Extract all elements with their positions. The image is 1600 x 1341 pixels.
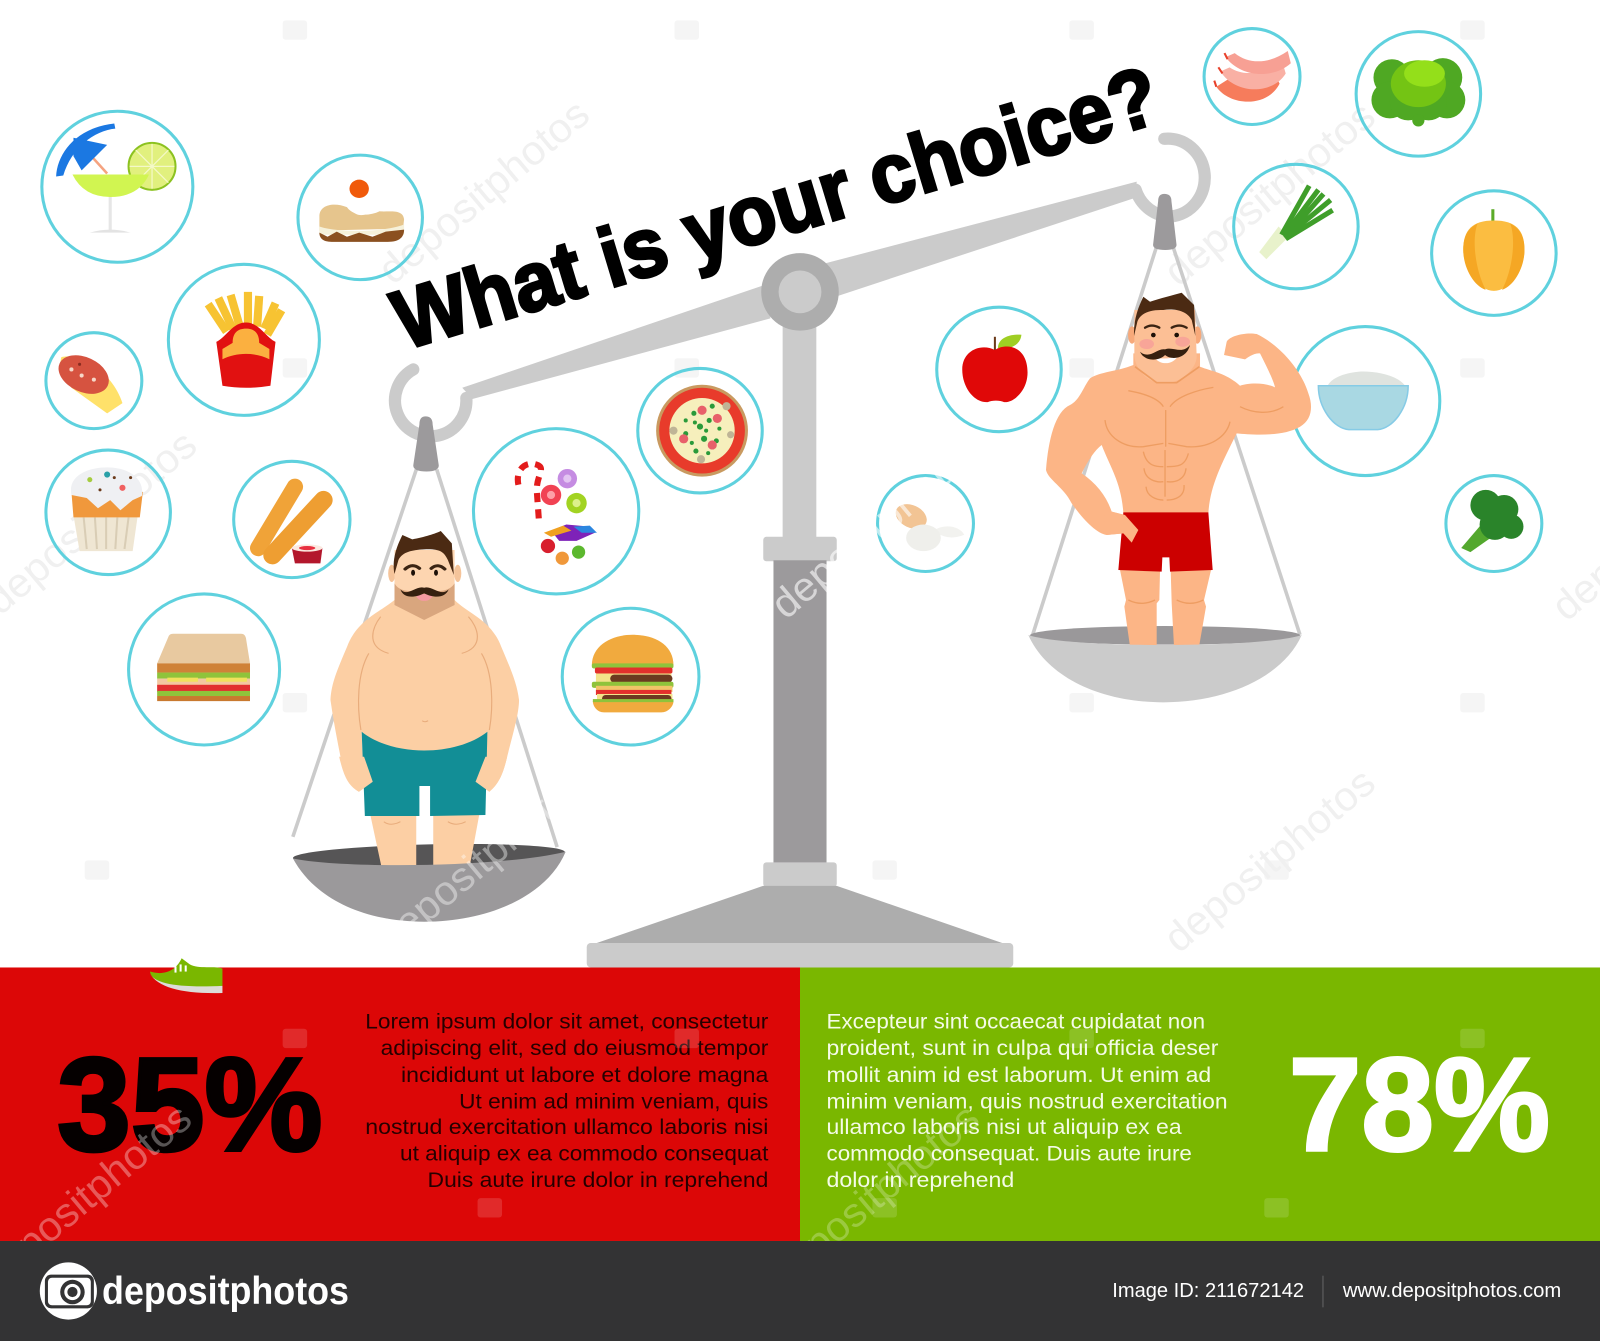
left pan bowl <box>293 852 566 922</box>
teeth <box>1154 355 1178 363</box>
hands <box>339 757 507 792</box>
website: www.depositphotos.com <box>1342 1280 1561 1302</box>
left pan back <box>293 841 565 869</box>
panel: red statistic band <box>0 967 800 1241</box>
icon: cheese sticks <box>258 487 323 563</box>
text block: right paragraph: mollit anim id est laborum. Ut enim ad <box>827 1063 1211 1087</box>
scale beam with hooks <box>395 139 1205 436</box>
icon: cake <box>319 180 404 242</box>
logo wordmark: depositphotos <box>102 1270 349 1313</box>
figure: muscular man on right pan <box>1028 293 1311 702</box>
icon: shrimp <box>1214 51 1291 102</box>
watermark pattern: depositphotos <box>369 90 598 293</box>
ears <box>388 565 395 582</box>
icon: rice bowl <box>1318 371 1408 430</box>
moustache <box>400 587 449 597</box>
text block: left paragraph: Duis aute irure dolor in reprehend <box>428 1168 768 1192</box>
face <box>1134 310 1197 383</box>
torso and arms <box>1046 333 1311 543</box>
icon: cabbage <box>1371 58 1465 127</box>
icon: cupcake <box>71 467 143 551</box>
torso and arms <box>330 600 519 792</box>
icon: camera logo <box>40 1262 97 1320</box>
text block: left paragraph: Lorem ipsum dolor sit amet, consectetur <box>365 1010 768 1034</box>
watermark pattern: depositphotos <box>1155 759 1384 961</box>
face <box>395 550 455 620</box>
text block: right paragraph: proident, sunt in culpa qui officia deser <box>827 1036 1218 1060</box>
icon: sandwich <box>157 634 250 701</box>
title: What is your choice? <box>382 48 1169 367</box>
text block: right paragraph: commodo consequat. Duis aute irure <box>827 1141 1192 1165</box>
panel: green statistic band <box>800 967 1600 1241</box>
text block: left paragraph <box>365 1010 768 1192</box>
watermark overlays <box>0 425 991 1297</box>
legs <box>1120 570 1211 647</box>
hair <box>1134 293 1195 336</box>
text block: left paragraph: Ut enim ad minim veniam, quis <box>459 1089 768 1113</box>
stat: 78%: 78% <box>1289 1031 1550 1179</box>
icon: spring onion <box>1259 186 1333 259</box>
body lines <box>359 617 492 824</box>
brows <box>405 566 445 569</box>
muscle lines <box>1105 387 1283 603</box>
icon: burger <box>592 635 673 712</box>
brows and eyes <box>1145 326 1187 328</box>
stat: 35%: 35% <box>57 1031 322 1179</box>
text block: left paragraph: nostrud exercitation ullamco laboris nisi <box>365 1115 768 1139</box>
ears <box>1128 326 1136 344</box>
text block: right paragraph: ullamco laboris nisi ut aliquip ex ea <box>827 1115 1182 1139</box>
right pan back <box>1030 626 1300 645</box>
text block: right paragraph <box>827 1010 1228 1192</box>
scale stand <box>587 306 1013 967</box>
text block: right paragraph: dolor in reprehend <box>827 1168 1014 1192</box>
text block: left paragraph: ut aliquip ex ea commodo consequat <box>400 1141 768 1165</box>
food circles: healthy <box>878 29 1556 572</box>
text block: left paragraph: incididunt ut labore et dolore magna <box>401 1063 768 1087</box>
watermark overlays: depositphotos <box>367 759 596 961</box>
text block: left paragraph: adipiscing elit, sed do eiusmod tempor <box>381 1036 768 1060</box>
icon: eggs <box>892 499 964 551</box>
legs <box>370 813 479 867</box>
text block: right paragraph: Excepteur sint occaecat cupidatat non <box>827 1010 1205 1034</box>
watermark overlays: depositphotos <box>759 1094 988 1297</box>
icon: fries <box>208 292 282 388</box>
icon: sneaker <box>150 958 222 993</box>
shorts <box>1118 512 1213 572</box>
right pan bowl <box>1028 635 1302 702</box>
mouth <box>415 594 434 601</box>
beard <box>395 583 455 620</box>
text block: right paragraph: minim veniam, quis nostrud exercitation <box>827 1089 1228 1113</box>
icon: candies <box>518 464 597 565</box>
icon: bell pepper <box>1463 209 1524 291</box>
hand <box>1103 512 1138 543</box>
hair <box>394 531 454 575</box>
food circles: unhealthy <box>42 111 762 745</box>
cheeks <box>1139 339 1154 349</box>
icon: salami bread <box>52 348 122 413</box>
image id: Image ID: 211672142 <box>1112 1280 1304 1302</box>
panel: footer bar <box>0 1241 1600 1341</box>
icon: cocktail <box>56 123 176 233</box>
figure: overweight man on left pan <box>293 531 566 922</box>
watermark pattern: depositphotos <box>1155 92 1384 295</box>
icon: broccoli <box>1461 490 1523 552</box>
icon: apple <box>962 335 1028 402</box>
icon: pizza <box>656 385 748 477</box>
watermark overlays: depositphotos <box>762 425 991 627</box>
shorts <box>362 732 487 816</box>
moustache <box>1140 345 1190 360</box>
right hanger and strings <box>1033 194 1300 635</box>
left hanger and strings <box>293 416 557 847</box>
